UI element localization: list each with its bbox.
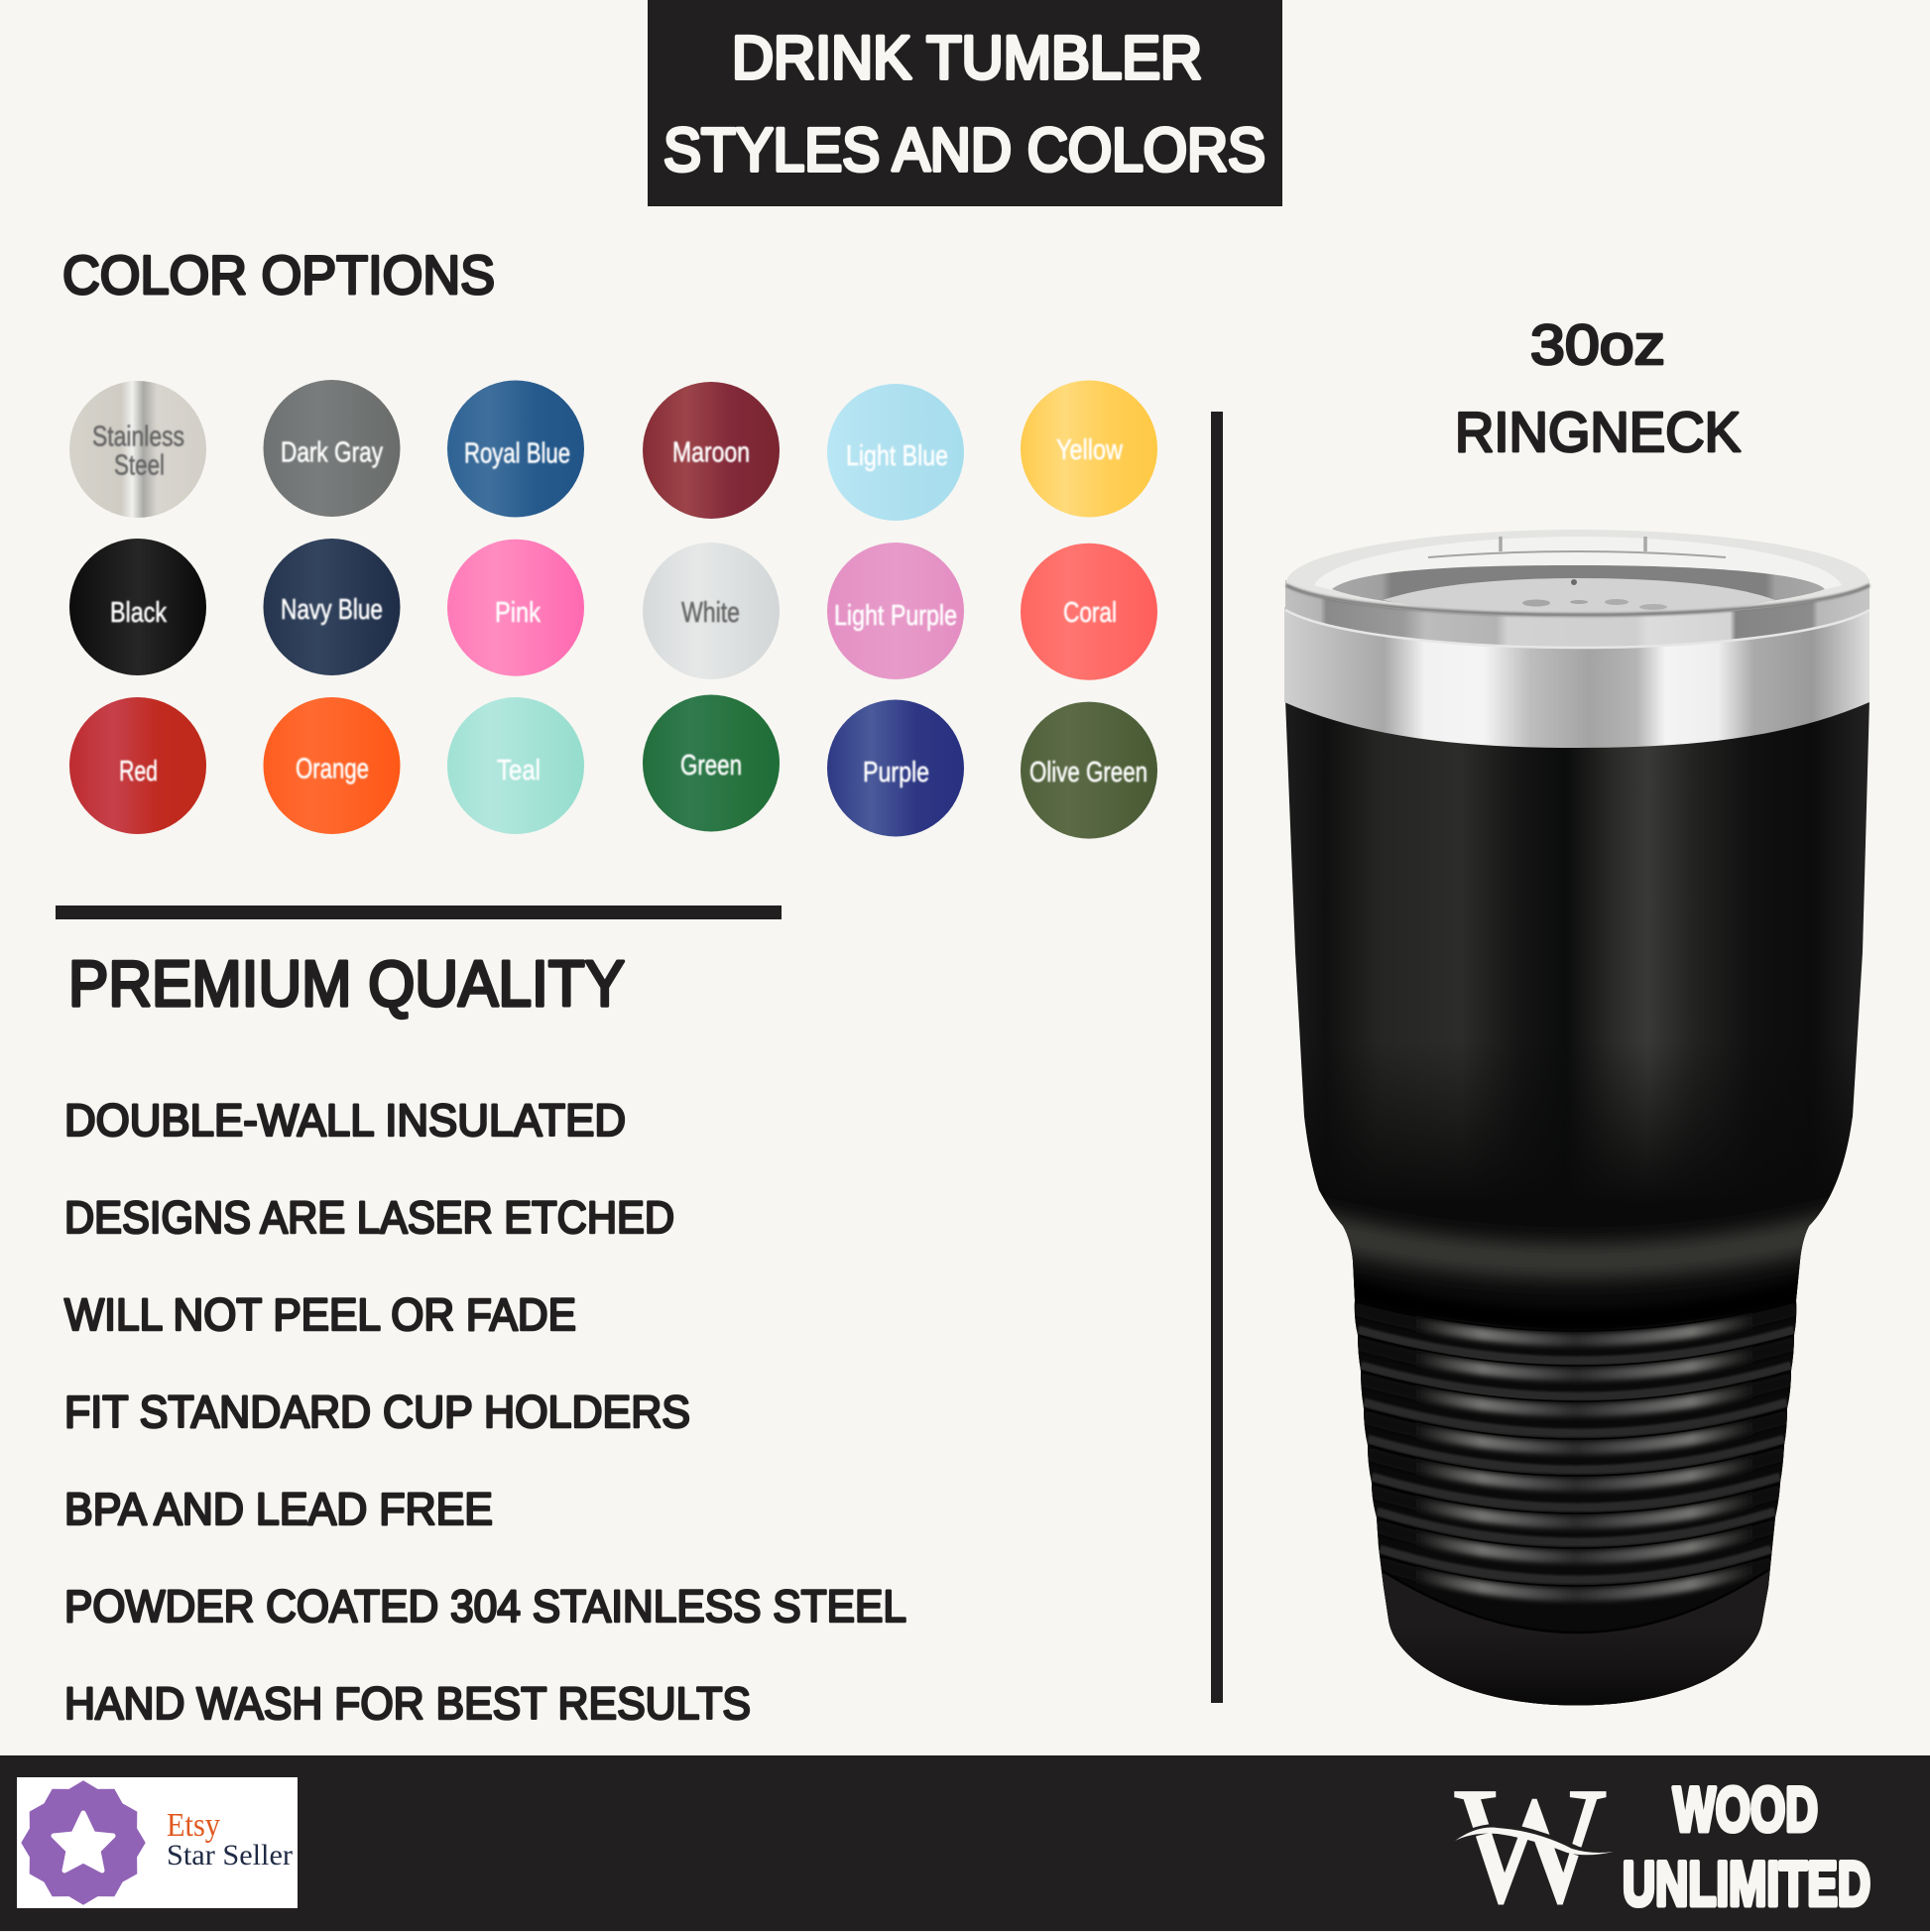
feature: laser etched: DESIGNS ARE LASER ETCHED bbox=[64, 1192, 674, 1243]
wordmark: wood: WOOD bbox=[1673, 1775, 1818, 1845]
heading: color options: COLOR OPTIONS bbox=[62, 244, 495, 305]
swatch: pink bbox=[447, 540, 584, 676]
swatch: royal blue bbox=[447, 381, 584, 518]
lid skirt bbox=[1285, 580, 1870, 648]
swatch: stainless steel bbox=[69, 381, 206, 518]
swatch: purple: Purple bbox=[863, 757, 929, 788]
swatch: green bbox=[643, 694, 780, 831]
badge text: etsy: Etsy bbox=[167, 1807, 220, 1844]
swatch: yellow: Yellow bbox=[1056, 434, 1124, 466]
swatch: red: Red bbox=[119, 756, 158, 787]
badge text: star seller: Star Seller bbox=[167, 1839, 293, 1872]
swatch: red bbox=[69, 697, 206, 834]
footer bar bbox=[0, 1753, 1930, 1932]
swatch: coral: Coral bbox=[1063, 597, 1117, 629]
swatch: teal bbox=[447, 697, 584, 834]
feature list bbox=[64, 1095, 906, 1729]
swatch: navy blue bbox=[264, 539, 401, 675]
feature: hand wash: HAND WASH FOR BEST RESULTS bbox=[64, 1678, 751, 1729]
swatch: teal: Teal bbox=[497, 755, 541, 786]
title banner: STYLES AND COLORS bbox=[663, 116, 1266, 183]
feature: cup holders: FIT STANDARD CUP HOLDERS bbox=[64, 1387, 690, 1437]
illustration: ringneck tumbler bbox=[1269, 530, 1884, 1716]
panel: color swatches bbox=[69, 380, 1157, 839]
swatch: white: White bbox=[681, 597, 740, 629]
title banner: DRINK TUMBLER bbox=[732, 24, 1202, 91]
swatch: orange: Orange bbox=[296, 754, 369, 785]
lid top bbox=[1286, 530, 1870, 617]
swatch: pink: Pink bbox=[495, 597, 541, 629]
swatch: black: Black bbox=[110, 597, 167, 629]
swatch: stainless steel: Stainless bbox=[92, 421, 184, 452]
feature: double-wall insulated: DOUBLE-WALL INSULATED bbox=[64, 1095, 626, 1146]
heading: premium quality: PREMIUM QUALITY bbox=[68, 947, 625, 1020]
feature: bpa free: BPA AND LEAD FREE bbox=[64, 1484, 493, 1534]
swatch: light purple bbox=[827, 543, 964, 679]
swatch: dark gray bbox=[264, 380, 401, 517]
swatch: coral bbox=[1021, 543, 1157, 680]
badge: etsy star seller bbox=[17, 1777, 298, 1908]
ribs bbox=[1355, 1300, 1796, 1595]
swatch: orange bbox=[264, 697, 401, 834]
logo: wood unlimited bbox=[1454, 1753, 1870, 1932]
steel band bbox=[1284, 607, 1870, 748]
tumbler base bbox=[1382, 1571, 1770, 1706]
swatch: white bbox=[643, 543, 780, 679]
swatch: light blue bbox=[827, 384, 964, 521]
swatch: stainless steel: Steel bbox=[114, 450, 165, 482]
icon: purple seal with star bbox=[21, 1780, 146, 1905]
clear lid bbox=[1285, 530, 1870, 648]
swatch: green: Green bbox=[680, 750, 742, 782]
swatch: navy blue: Navy Blue bbox=[281, 594, 383, 626]
swatch: light purple: Light Purple bbox=[834, 600, 957, 632]
tumbler body bbox=[1269, 684, 1884, 1716]
feature: powder coated: POWDER COATED 304 STAINLESS STEEL bbox=[64, 1581, 906, 1631]
swatch: maroon bbox=[643, 382, 780, 519]
swatch: yellow bbox=[1021, 381, 1157, 518]
heading: tumbler style: RINGNECK bbox=[1455, 401, 1741, 464]
heading: tumbler size: 30oz bbox=[1530, 313, 1665, 377]
swatch: maroon: Maroon bbox=[672, 437, 750, 469]
title banner bbox=[648, 0, 1282, 206]
feature: will not peel: WILL NOT PEEL OR FADE bbox=[64, 1289, 576, 1340]
swatch: light blue: Light Blue bbox=[846, 440, 948, 472]
swatch: dark gray: Dark Gray bbox=[281, 437, 383, 469]
swatch: purple bbox=[827, 700, 964, 837]
swatch: olive green: Olive Green bbox=[1029, 757, 1147, 788]
swatch: olive green bbox=[1021, 702, 1157, 839]
swatch: black bbox=[69, 539, 206, 675]
swatch: royal blue: Royal Blue bbox=[464, 438, 570, 470]
